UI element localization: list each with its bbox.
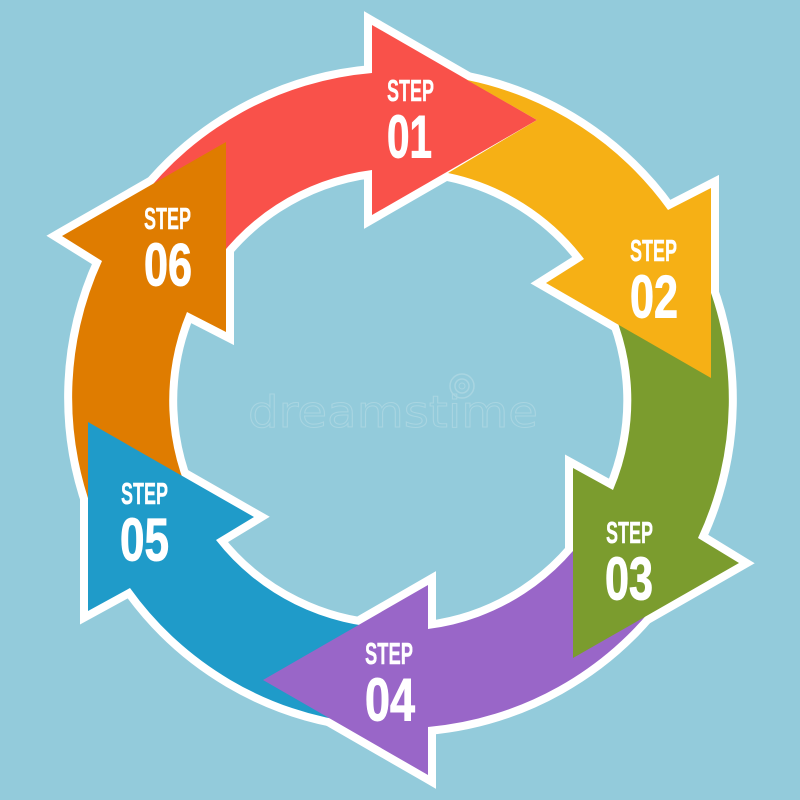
arrow: step 05 xyxy=(88,422,394,723)
arrow: step 01: STEP xyxy=(387,73,434,108)
watermark: dreamstime: dreamstime xyxy=(248,387,538,438)
arrow: step 06: STEP xyxy=(144,201,191,236)
arrow: step 02: STEP xyxy=(630,233,677,268)
arrow: step 06: 06 xyxy=(144,232,192,298)
arrow: step 01 xyxy=(140,25,537,278)
arrow: step 04: 04 xyxy=(365,666,415,734)
arrow: step 03: 03 xyxy=(605,546,653,612)
arrow: step 05: STEP xyxy=(121,476,168,511)
arrow: step 01: 01 xyxy=(387,104,432,170)
arrow: step 04 xyxy=(263,519,661,775)
arrow: step 05: 05 xyxy=(120,506,169,574)
arrow: step 02: 02 xyxy=(630,264,678,330)
arrow: step 02 xyxy=(448,80,711,378)
white outline of the ring xyxy=(62,25,739,775)
arrow: step 03: STEP xyxy=(606,515,653,550)
arrow: step 04: STEP xyxy=(365,636,413,671)
arrow: step 06 xyxy=(62,142,226,525)
arrow: step 03 xyxy=(573,272,739,658)
